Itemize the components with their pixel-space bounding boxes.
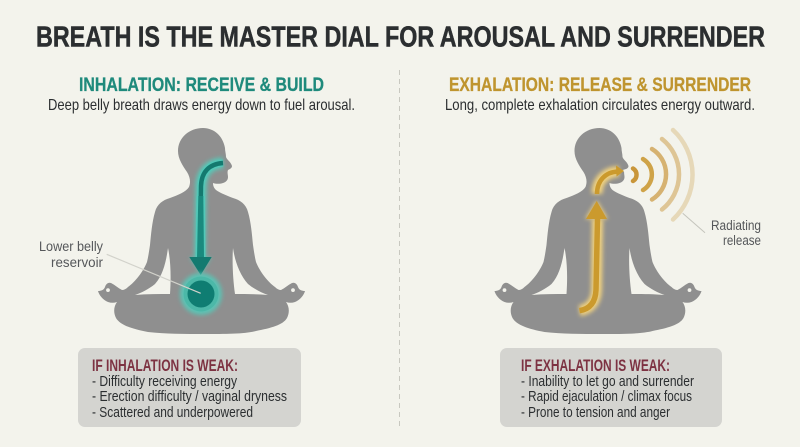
callout: radiating release — [683, 213, 761, 248]
panel: if exhalation is weak: IF EXHALATION IS WEAK: — [521, 357, 670, 375]
arrow: exhale breath — [580, 166, 624, 311]
panel: if inhalation is weak: - Scattered and underpowered — [92, 404, 253, 421]
panel: exhalation — [445, 74, 761, 427]
panel: if exhalation is weak: - Prone to tension and anger — [521, 404, 670, 421]
panel: if exhalation is weak: - Rapid ejaculation / climax focus — [521, 388, 692, 405]
panel: if exhalation is weak — [500, 348, 722, 427]
icon: lower belly reservoir — [180, 273, 222, 315]
icon: radiating waves — [633, 130, 693, 220]
panel: if inhalation is weak: IF INHALATION IS WEAK: — [92, 357, 238, 375]
callout: lower belly reservoir: Lower belly — [39, 239, 103, 254]
panel: if inhalation is weak — [78, 348, 301, 427]
callout: radiating release: Radiating — [711, 218, 761, 233]
heading: inhalation: INHALATION: RECEIVE & BUILD — [79, 74, 324, 96]
text: inhalation description: Deep belly breath draws energy down to fuel arousal. — [48, 97, 355, 114]
figure: meditating silhouette exhaling — [494, 128, 702, 334]
panel: if exhalation is weak: - Inability to let go and surrender — [521, 373, 694, 390]
callout: lower belly reservoir — [39, 239, 201, 293]
panel: inhalation — [39, 74, 355, 427]
panel: if inhalation is weak: - Difficulty receiving energy — [92, 373, 237, 390]
panel: if inhalation is weak: - Erection difficulty / vaginal dryness — [92, 388, 287, 405]
figure: meditating silhouette inhaling — [98, 128, 305, 334]
callout: radiating release: release — [723, 233, 761, 248]
callout: lower belly reservoir: reservoir — [51, 255, 103, 270]
arrow: inhale breath — [189, 163, 223, 275]
